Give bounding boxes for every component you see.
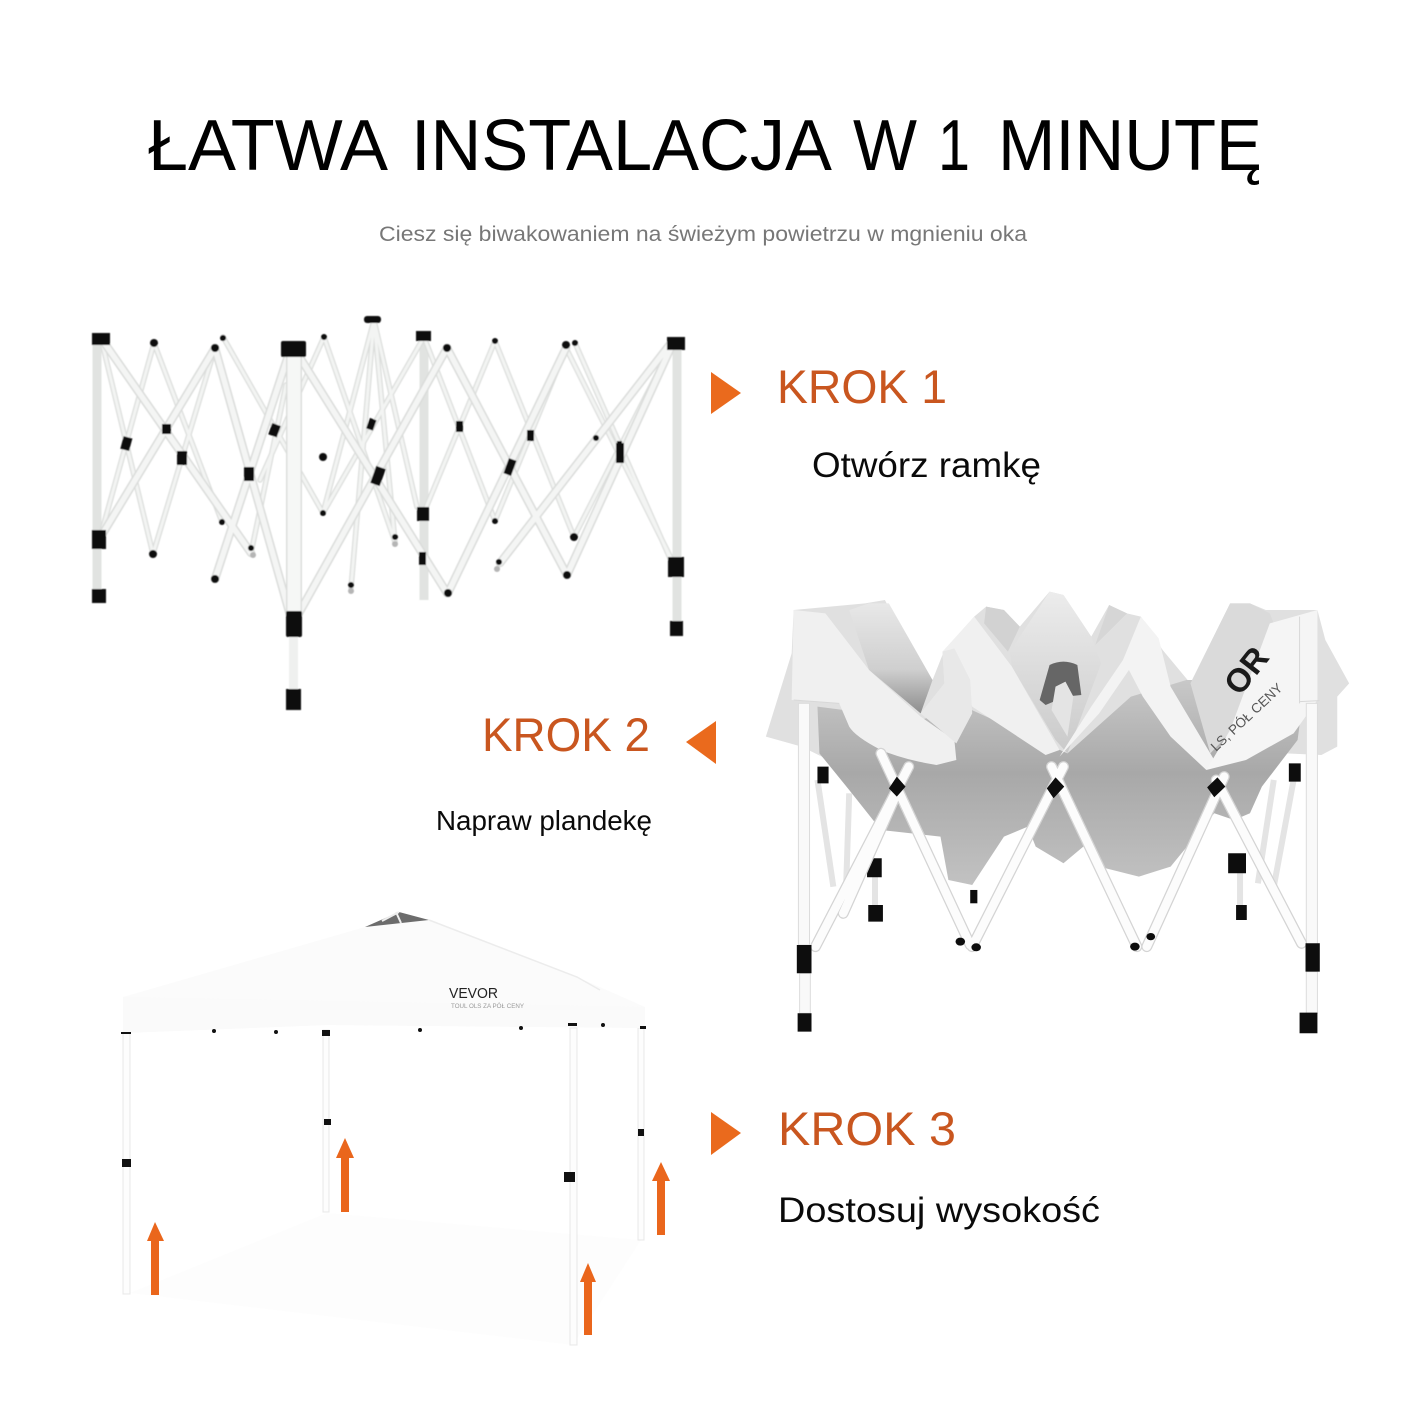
- roof underside fittings: [121, 1023, 646, 1182]
- arrow: step 2: [686, 721, 716, 764]
- white steel legs: [798, 703, 1317, 1013]
- right white flap: [1206, 610, 1317, 770]
- right back panel: [1190, 603, 1274, 753]
- title: ŁATWA: [148, 106, 388, 186]
- title: MINUTĘ: [998, 106, 1262, 186]
- tarp logo fragment: OR: [1216, 639, 1276, 701]
- canopy logo: VEVOR: [449, 986, 498, 1002]
- roof vent: [365, 912, 429, 927]
- text: step 1 description: Otwórz ramkę: [812, 446, 1041, 485]
- illustration: open frame, step 1: [92, 316, 685, 710]
- title: 1: [938, 106, 970, 186]
- arrow: lift front right: [580, 1263, 596, 1335]
- subtitle: Ciesz się biwakowaniem na świeżym powietrzu w mgnieniu oka: [379, 223, 1027, 246]
- text: step 2 description: Napraw plandekę: [436, 805, 652, 836]
- floor shadow: [130, 1213, 641, 1345]
- roof: [123, 912, 645, 1033]
- hanging tarp underside: [817, 680, 1306, 885]
- centre peak: [1010, 592, 1101, 753]
- middle right flap: [1060, 617, 1214, 770]
- arrow: step 3: [711, 1112, 741, 1155]
- title: W: [853, 106, 917, 186]
- arrow: lift back right: [652, 1162, 670, 1235]
- arrow: step 1: [711, 372, 741, 414]
- tarp tagline fragment: LS, PÓŁ CENY: [1208, 680, 1286, 754]
- illustration: finished canopy, step 3: [121, 912, 670, 1345]
- back peak left: [984, 607, 1020, 652]
- black fittings: [92, 316, 685, 710]
- arrow: lift back left: [336, 1138, 354, 1212]
- rear legs and back struts: [817, 763, 1301, 922]
- illustration: frame with tarp, step 2: [766, 592, 1349, 1033]
- canopy tagline: TOUL OLS ZA PÓŁ CENY: [451, 1001, 525, 1010]
- arrow: lift front left: [147, 1222, 164, 1295]
- dark shadow fold: [849, 603, 933, 713]
- text: step 3 description: Dostosuj wysokość: [778, 1191, 1100, 1230]
- white scissor struts: [815, 753, 1302, 947]
- heading: step 3: KROK 3: [778, 1102, 956, 1155]
- heading: step 2: KROK 2: [482, 708, 650, 761]
- back canopy: [766, 592, 1349, 780]
- back peak middle: [1095, 605, 1127, 645]
- black fittings: [797, 777, 1320, 1033]
- legs: [123, 1028, 644, 1345]
- title: INSTALACJA: [411, 106, 832, 186]
- heading: step 1: KROK 1: [777, 360, 947, 413]
- middle left flap: [921, 617, 1060, 755]
- left white flap: [792, 610, 956, 765]
- peak opening: [1040, 662, 1081, 705]
